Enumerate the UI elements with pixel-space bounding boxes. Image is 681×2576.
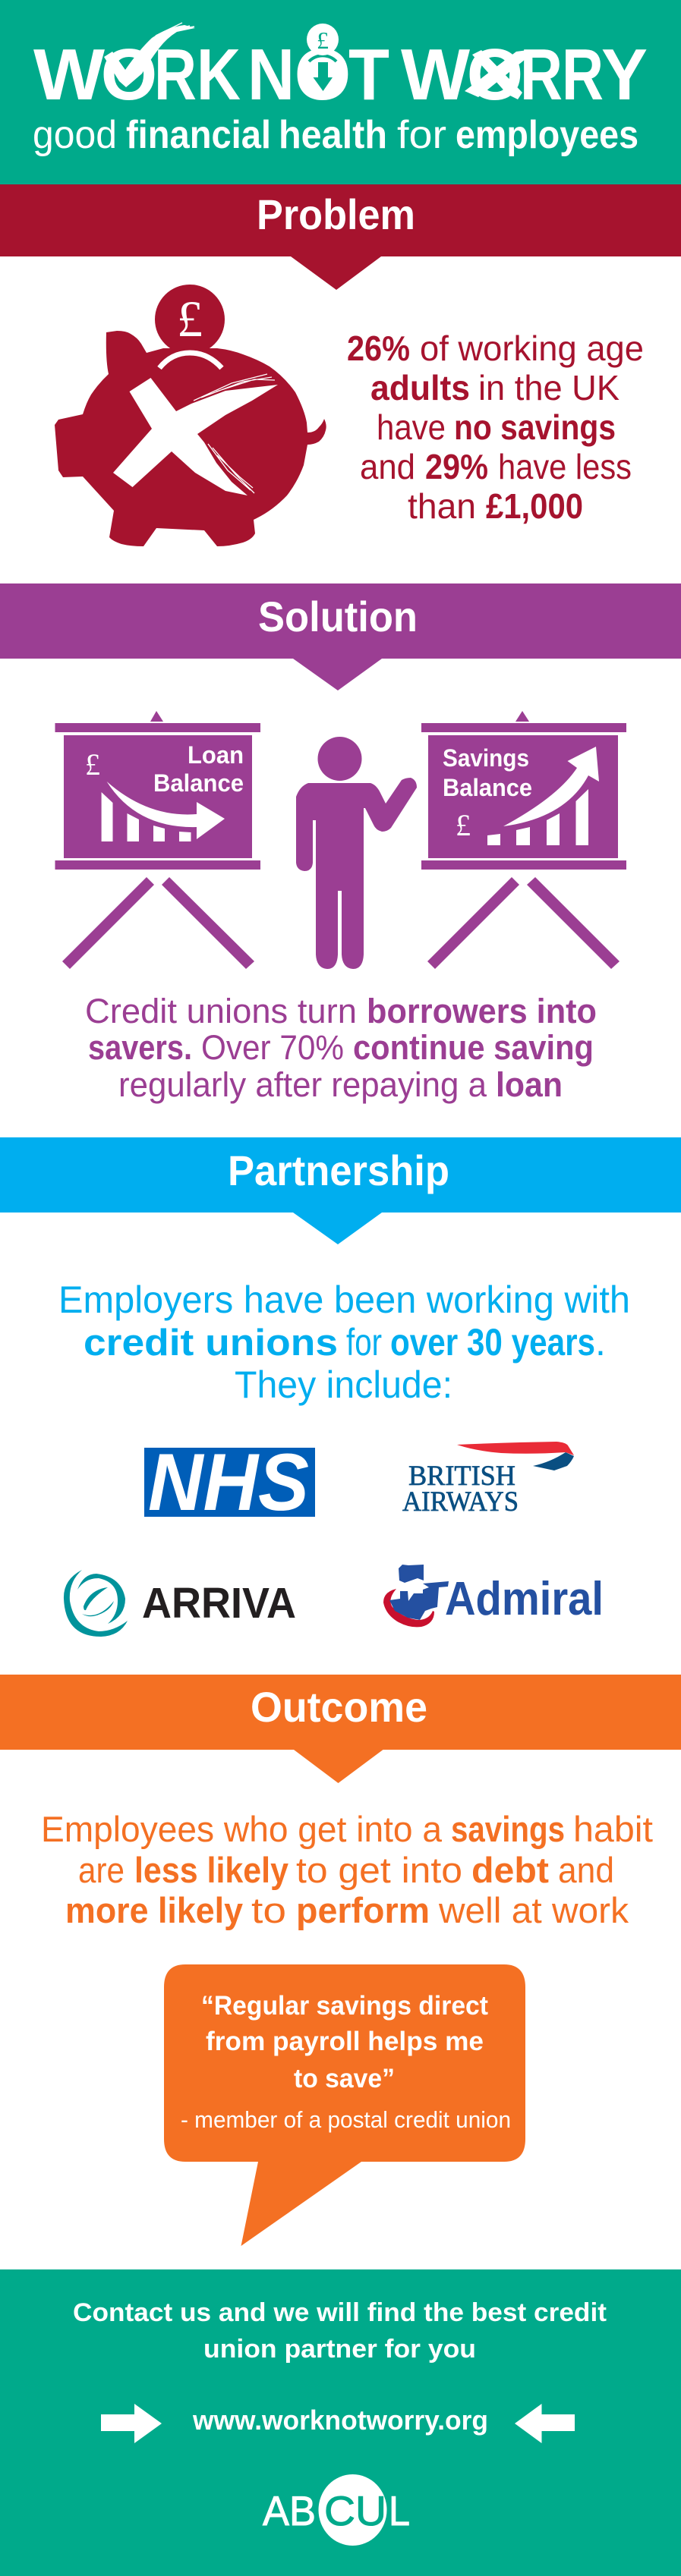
subtitle: good [33,113,117,157]
text block: partnership statement: Employers have been working with [58,1279,630,1321]
icon: coin dropping into O with down arrow [307,24,339,91]
title: Work Not Worry: R [562,34,604,115]
text block: partnership statement [58,1279,630,1406]
text block: outcome statement: to [251,1890,286,1930]
text block: outcome statement [41,1809,653,1930]
text block: partnership statement: They include: [235,1363,452,1406]
title: Work Not Worry: N [247,34,295,115]
icon: pound sign: £ [85,747,100,782]
text block: partnership statement: . [595,1321,606,1363]
text block: solution statement: continue saving [353,1028,594,1067]
logo: British Airways [402,1442,574,1518]
text block: problem statistics: adults [370,368,470,407]
text block: outcome statement: perform [296,1890,430,1930]
icon: cross through third O [465,50,528,99]
heading: Partnership: Partnership [228,1146,449,1194]
logo: British Airways: BRITISH [408,1461,515,1492]
heading: Solution: Solution [258,593,418,640]
text block: contact [73,2298,607,2364]
bar chart: falling bars [102,792,191,841]
text block: solution statement: loan [496,1065,563,1104]
icon: pound sign: £ [456,808,471,842]
text block: problem statistics: 26% [347,329,410,368]
text block: problem statistics [347,329,644,526]
website link: www.worknotworry.org [192,2405,488,2436]
title: Work Not Worry: O [295,34,351,115]
label: loan balance [153,741,244,797]
text block: solution statement: borrowers into [367,992,597,1030]
logo: British Airways: AIRWAYS [402,1486,519,1518]
text block: solution statement: regularly after repaying a [118,1065,487,1104]
logo: ABCUL [263,2474,410,2546]
text block: problem statistics: of working age [420,329,644,368]
logo: Arriva [64,1570,296,1637]
heading: Problem: Problem [257,190,415,238]
text block: solution statement: savers. [88,1028,192,1067]
text block: partnership statement: credit unions [84,1323,338,1363]
title: Work Not Worry [33,34,648,115]
heading: Outcome: Outcome [251,1683,427,1731]
text block: outcome statement: to get into [296,1850,462,1890]
title: Work Not Worry: K [197,34,241,115]
text block: outcome statement: Employees who get into a [41,1809,443,1849]
icon: tick through first O [104,23,195,87]
label: loan balance: Loan [188,741,244,769]
text block: outcome statement: more likely [65,1890,243,1930]
text block: solution statement [85,992,597,1104]
title: Work Not Worry: R [154,34,197,115]
arrow: pointing right [101,2404,162,2443]
text block: problem statistics: have less [498,447,632,486]
title: Work Not Worry: R [520,34,563,115]
subtitle: financial [126,113,271,157]
subtitle: employees [456,113,638,157]
text block: outcome statement: well at work [438,1890,629,1930]
icon: rising arrow [503,747,599,826]
text block: outcome statement: less likely [134,1850,288,1890]
chart board: savings balance [421,711,626,969]
title: Work Not Worry: T [348,34,389,115]
logo: ABCUL: AB [263,2487,316,2534]
label: loan balance: Balance [153,769,244,797]
subtitle [33,113,638,157]
quote text: - member of a postal credit union [181,2106,511,2133]
text block: problem statistics: in the UK [478,368,620,407]
arrow: pointing left [515,2404,575,2443]
title: Work Not Worry: O [467,34,523,115]
text block: outcome statement: and [558,1850,614,1890]
title: Work Not Worry: W [33,34,105,115]
text block: outcome statement: habit [573,1809,653,1849]
label: savings balance [443,744,532,801]
text block: problem statistics: £1,000 [486,486,583,526]
panel: solution banner [0,583,681,690]
icon: coin dropping into O with down arrow: £ [317,27,329,54]
quote text: “Regular savings direct [201,1991,488,2021]
icon: piggy bank with cross [55,285,326,546]
logo: Arriva: ARRIVA [142,1579,296,1628]
callout: quote speech bubble [164,1964,525,2246]
panel: footer [0,2269,681,2576]
text block: contact: union partner for you [203,2335,476,2364]
icon: presenter figure [296,737,417,969]
title: Work Not Worry: Y [601,34,648,115]
subtitle: health [279,113,387,157]
quote text [181,1991,511,2133]
bar chart: rising bars [487,789,588,845]
text block: contact: Contact us and we will find the best credit [73,2298,607,2327]
title: Work Not Worry: O [101,34,157,115]
text block: solution statement: Over 70% [201,1028,344,1067]
text block: problem statistics: than [408,486,476,526]
text block: partnership statement: over 30 years [390,1321,595,1363]
icon: falling arrow [107,782,225,839]
text block: problem statistics: no savings [454,407,616,447]
logo: Admiral: Admiral [445,1573,604,1625]
text block: outcome statement: debt [471,1850,549,1890]
quote text: from payroll helps me [206,2027,484,2056]
text block: outcome statement: savings [451,1809,565,1849]
title: Work Not Worry: W [401,34,470,115]
text block: partnership statement: for [346,1321,382,1363]
logo: ABCUL: CU [324,2487,386,2534]
panel: outcome banner [0,1675,681,1783]
text block: outcome statement: are [78,1850,125,1890]
logo: Admiral [383,1565,604,1627]
logo: NHS: NHS [148,1436,309,1527]
panel: problem banner [0,184,681,290]
text block: problem statistics: have [377,407,446,447]
icon: piggy bank with cross: £ [177,290,203,348]
panel: header [0,0,681,184]
chart board: loan balance [55,711,260,969]
text block: solution statement: Credit unions turn [85,992,357,1030]
text block: problem statistics: and [360,447,415,486]
label: savings balance: Balance [443,774,532,801]
subtitle: for [397,113,446,157]
logo: ABCUL: L [389,2487,410,2534]
quote text: to save” [294,2064,395,2093]
text block: problem statistics: 29% [425,447,488,486]
panel: partnership banner [0,1137,681,1244]
label: savings balance: Savings [443,744,529,772]
